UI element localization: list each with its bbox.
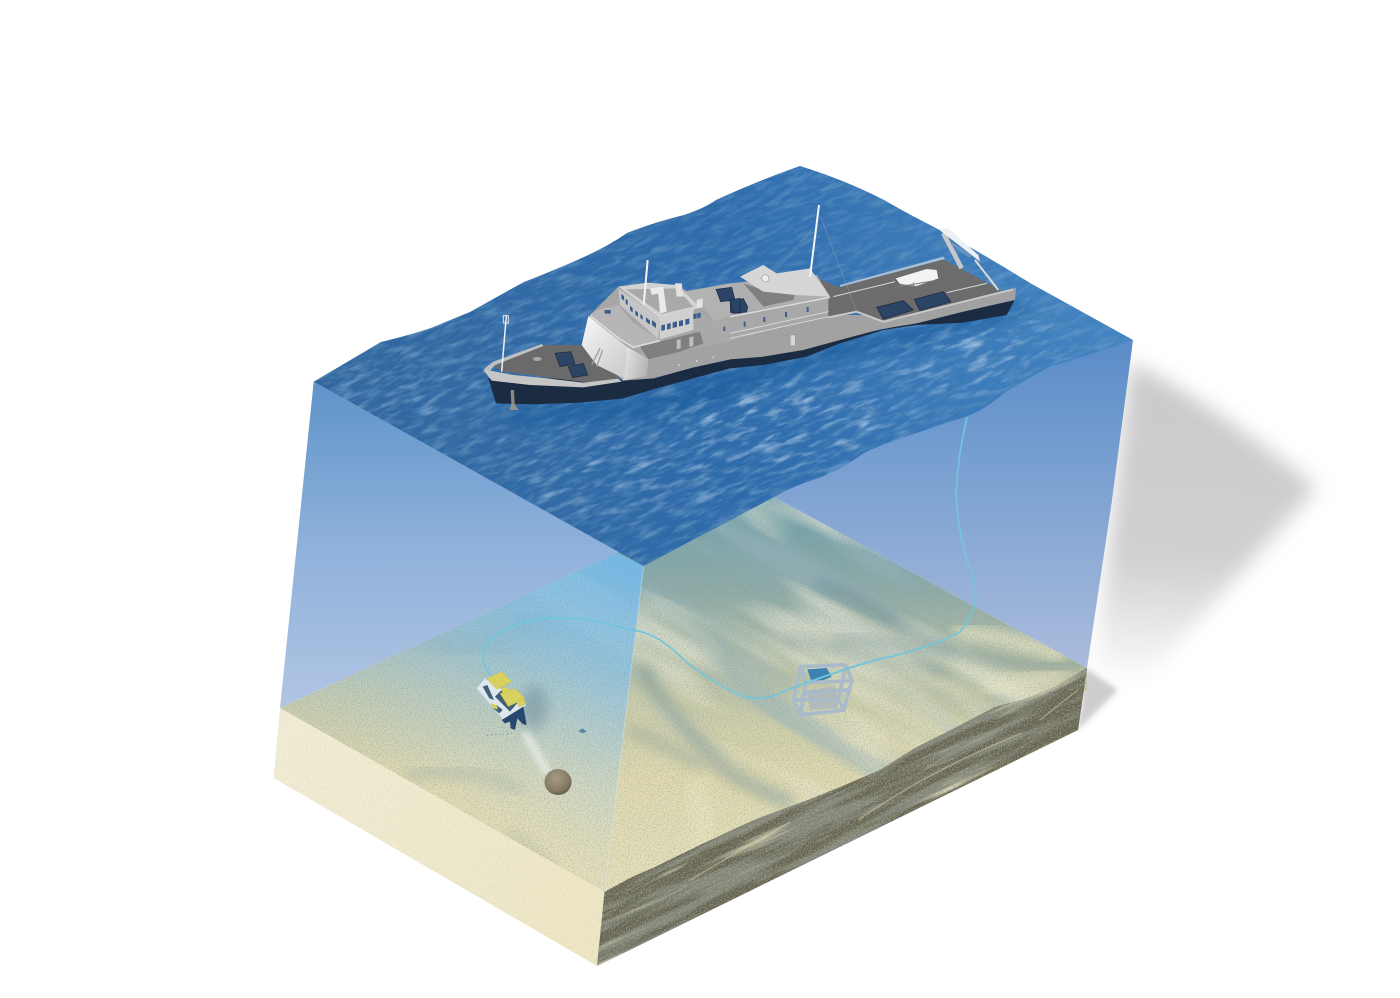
roof containers (716, 287, 740, 313)
bridge mast (644, 260, 648, 305)
side door (790, 335, 795, 346)
reflection under the ship (510, 300, 1030, 422)
aft rail (828, 289, 1013, 322)
dune highlights (690, 632, 1060, 860)
radar dome (762, 275, 769, 282)
foredeck containers (555, 352, 588, 378)
recessed walkway (640, 332, 703, 359)
boat cradle (895, 280, 938, 289)
cage lower interior (807, 687, 838, 710)
bow mast head (503, 316, 508, 323)
ROV flotation (487, 672, 526, 709)
ROV shadow (520, 686, 548, 730)
bridge side (618, 288, 660, 339)
funnel equipment (675, 283, 703, 308)
bright sediment layers (690, 690, 1078, 880)
aft half of ship (730, 205, 1016, 368)
light sediment grain (590, 660, 1090, 970)
navy containers (730, 292, 951, 319)
side windows (744, 307, 809, 327)
sediment strata cut face (597, 668, 1087, 966)
right water wall (644, 340, 1133, 668)
spherical seabed object (544, 769, 572, 795)
fine sediment grain (590, 660, 1090, 970)
sampled debris marks (487, 733, 512, 735)
dune shadows (410, 583, 1083, 870)
light ripples (321, 168, 1111, 564)
ROV manipulators (502, 707, 527, 730)
walkway doors (677, 336, 693, 349)
foredeck (493, 345, 620, 382)
hull side lights (678, 356, 714, 366)
seabed surface (280, 497, 1087, 892)
sand grain (280, 497, 1087, 892)
ROV underwater vehicle (477, 672, 587, 735)
superstructure base (582, 285, 730, 381)
aft deck back wall (840, 257, 945, 288)
ROV work trail (526, 735, 546, 770)
cable over the cage (787, 660, 875, 690)
small object (578, 728, 587, 733)
hull side (647, 342, 730, 378)
organic dune relief (535, 497, 1057, 800)
forward hull (488, 359, 730, 404)
house roof (683, 283, 730, 322)
ROV frame (477, 678, 526, 722)
strata bands (597, 668, 1087, 966)
house roof (730, 275, 830, 315)
tether cable (483, 417, 976, 698)
roof edge (730, 297, 830, 317)
tint of seabed seen through the left wall (294, 553, 644, 836)
bridge deck inner (626, 288, 693, 314)
bow bulwark (483, 344, 543, 371)
cast shadow of the water block (1077, 362, 1317, 731)
cage struts (793, 665, 852, 715)
forward white bulkhead (582, 316, 627, 378)
aft deck (818, 259, 1002, 321)
deck fitting (533, 357, 542, 361)
angled hull panel (622, 347, 650, 381)
work boat (896, 269, 938, 286)
mast (810, 205, 819, 277)
bridge equipment (650, 287, 667, 313)
A-frame crane (938, 228, 998, 290)
flybridge supports (743, 283, 795, 307)
ROV frame openings (483, 685, 520, 713)
anchor (509, 390, 519, 410)
rigging (777, 217, 857, 312)
forward half of ship (483, 260, 740, 410)
ocean surface (314, 166, 1133, 566)
lower house deck (590, 305, 660, 347)
aft hull side (730, 287, 1016, 359)
cage contents (807, 668, 832, 682)
sand front-left cut face (270, 700, 610, 970)
stairway (592, 348, 603, 367)
bridge windows (605, 294, 725, 331)
ship (483, 205, 1016, 410)
left water wall (280, 382, 644, 708)
aft hull (730, 299, 1015, 368)
mid house side (693, 310, 730, 347)
house side (730, 297, 828, 342)
bridge deck (618, 283, 700, 318)
bow band (483, 370, 622, 387)
bow mast (502, 316, 506, 372)
seam between the two water walls (604, 566, 644, 892)
lower deck edge (590, 316, 660, 347)
dark ripples (318, 166, 1128, 566)
house ribs (730, 312, 828, 338)
cage / tether management frame (793, 665, 852, 715)
bridge front (659, 308, 693, 339)
deck stripes (833, 282, 987, 297)
flybridge (740, 265, 830, 297)
